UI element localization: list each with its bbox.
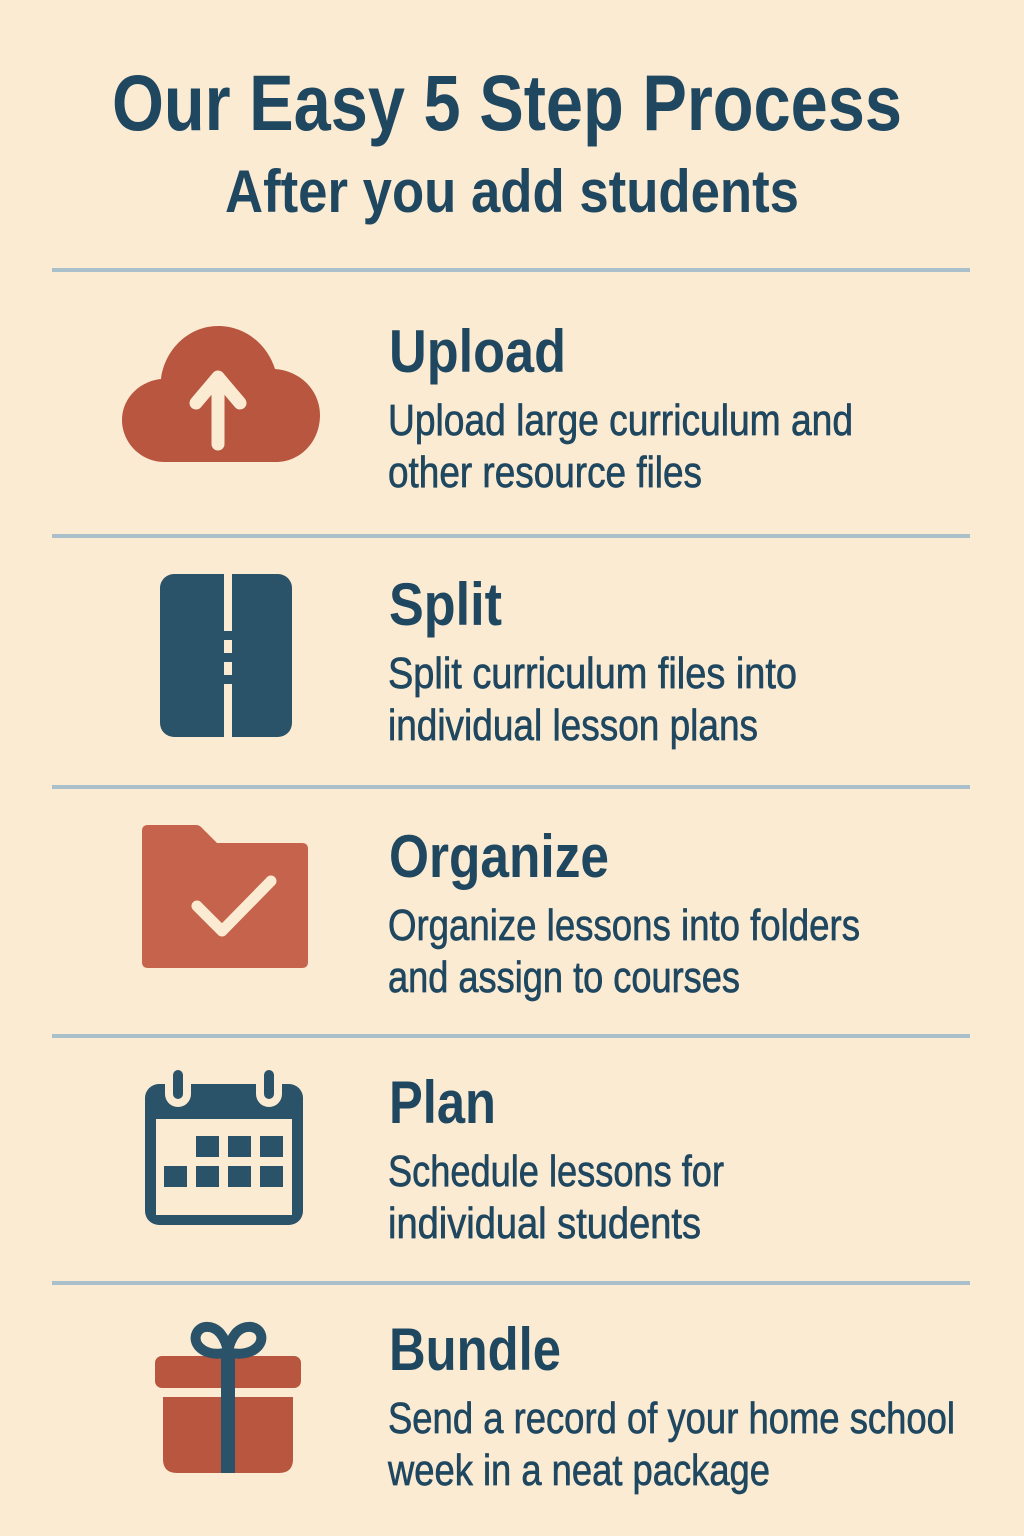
description: organize: and assign to courses	[388, 953, 740, 1002]
heading: bundle: Bundle	[389, 1316, 561, 1383]
description: upload: other resource files	[388, 448, 702, 497]
icon: gift box	[155, 1327, 301, 1473]
title: Our Easy 5 Step Process	[112, 58, 902, 147]
description: plan: individual students	[388, 1199, 701, 1248]
description: organize: Organize lessons into folders	[388, 901, 860, 950]
description: upload	[388, 396, 853, 497]
panel: step 1 upload	[122, 318, 853, 497]
description: plan	[388, 1147, 724, 1248]
heading: plan: Plan	[389, 1069, 496, 1136]
panel: step 5 bundle	[155, 1316, 955, 1495]
description: bundle	[387, 1394, 955, 1495]
icon: cloud with up arrow	[122, 326, 320, 462]
panel: step 2 split	[160, 571, 797, 750]
icon: split document	[160, 574, 292, 737]
heading: organize: Organize	[389, 823, 609, 890]
subtitle: After you add students	[225, 158, 799, 225]
heading: upload: Upload	[389, 318, 566, 385]
description: upload: Upload large curriculum and	[388, 396, 853, 445]
panel: step 3 organize	[142, 823, 860, 1002]
description: split	[388, 649, 797, 750]
icon: calendar	[145, 1070, 303, 1225]
description: bundle: week in a neat package	[387, 1446, 770, 1495]
description: plan: Schedule lessons for	[388, 1147, 724, 1196]
description: split: individual lesson plans	[388, 701, 758, 750]
description: split: Split curriculum files into	[388, 649, 797, 698]
description: organize	[388, 901, 860, 1002]
icon: folder with check	[142, 825, 308, 968]
heading: split: Split	[389, 571, 502, 638]
panel: step 4 plan	[145, 1069, 724, 1248]
